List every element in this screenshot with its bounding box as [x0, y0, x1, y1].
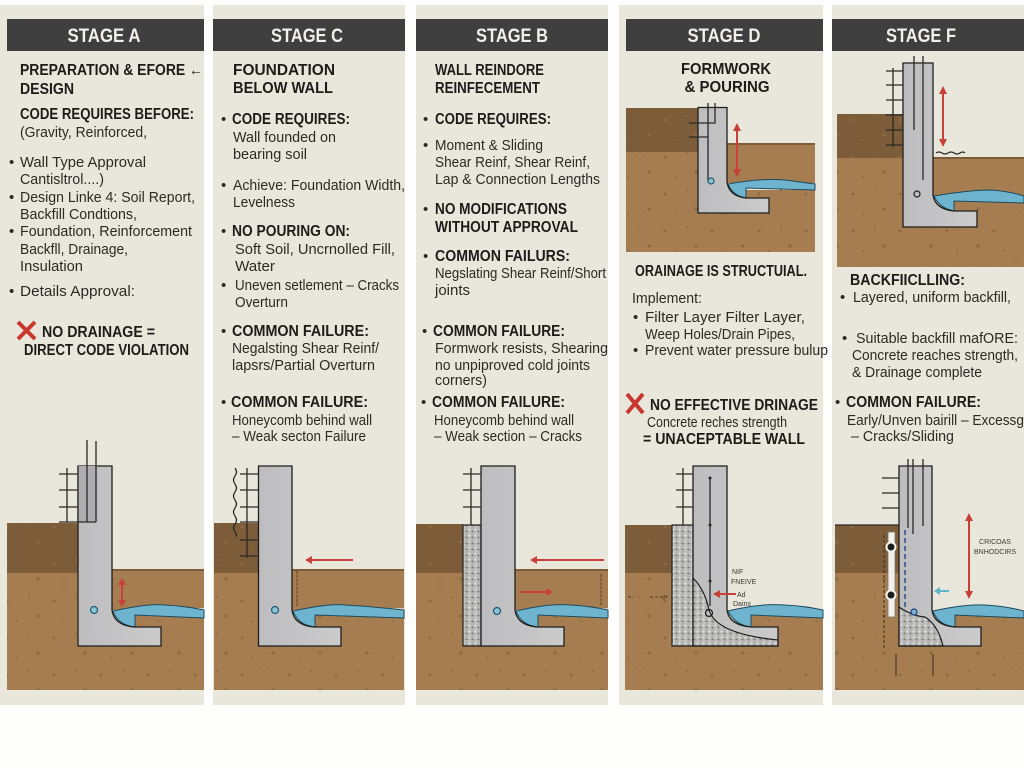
text: stage A requirements: Design Linke 4: Soil Report, — [20, 189, 195, 206]
text: stage C requirements: FOUNDATION — [233, 62, 335, 79]
text: stage D requirements: ORAINAGE IS STRUCTUIAL. — [635, 263, 807, 280]
panel: stage A — [0, 5, 204, 705]
text: stage F requirements: • — [835, 394, 840, 411]
text: stage B requirements: • — [423, 201, 428, 218]
diagram: stage D lower wall section: Dains — [733, 601, 751, 608]
text: stage B requirements: Honeycomb behind wall — [434, 412, 574, 429]
text: stage B requirements: COMMON FAILURE: — [432, 394, 565, 411]
text: stage D requirements: Filter Layer Filter Layer, — [645, 309, 805, 326]
text: stage A requirements: Details Approval: — [20, 283, 135, 300]
text: stage B requirements: CODE REQUIRES: — [435, 111, 551, 128]
text: stage D requirements: Implement: — [632, 290, 702, 307]
text: stage A requirements: CODE REQUIRES BEFORE: — [20, 106, 194, 123]
text: stage D requirements: • — [633, 309, 638, 326]
text: stage F requirements — [835, 272, 1024, 445]
text: stage F requirements: COMMON FAILURE: — [846, 394, 981, 411]
text: stage A requirements: • — [9, 189, 14, 206]
panel: stage F — [832, 5, 1024, 705]
text: stage B requirements: COMMON FAILURS: — [435, 248, 570, 265]
text: stage B requirements: • — [423, 248, 428, 265]
text: stage A requirements: Foundation, Reinforcement — [20, 223, 193, 240]
panel: stage C — [213, 5, 405, 705]
text: stage C requirements: Wall founded on — [233, 129, 336, 146]
text: stage F requirements: Suitable backfill mafORE: — [856, 330, 1018, 347]
text: stage C requirements: Achieve: Foundation Width, — [233, 177, 405, 194]
text: stage A requirements: • — [9, 223, 14, 240]
text: stage C requirements: Soft Soil, Uncrnolled Fill, — [235, 241, 395, 258]
text: stage A requirements: Backfll, Drainage, — [20, 241, 128, 258]
text: stage C requirements: BELOW WALL — [233, 80, 333, 97]
text: stage B requirements — [421, 62, 608, 445]
text: stage B requirements: WITHOUT APPROVAL — [435, 219, 578, 236]
text: stage B requirements: joints — [434, 282, 470, 299]
subheading: formwork and pouring — [681, 61, 771, 96]
text: stage B requirements: no unpiproved cold joints — [435, 357, 590, 374]
text: stage C requirements: bearing soil — [233, 146, 307, 163]
heading: stage C: STAGE C — [271, 26, 343, 47]
text: stage C requirements: • — [221, 394, 226, 411]
callout: no drainage: NO DRAINAGE = — [42, 324, 155, 341]
text: stage B requirements: Moment & Sliding — [435, 137, 543, 154]
heading: stage F: STAGE F — [886, 26, 956, 47]
text: stage A requirements: Backfill Condtions, — [20, 206, 137, 223]
callout: no effective drainage: Concrete reches strength — [647, 414, 787, 431]
callout: no drainage: DIRECT CODE VIOLATION — [24, 342, 189, 359]
text: stage C requirements: Overturn — [235, 294, 288, 311]
diagram: stage D upper wall section — [626, 103, 815, 252]
text: stage B requirements: Lap & Connection Lengths — [435, 171, 600, 188]
diagram: stage C wall section — [214, 466, 404, 690]
text: stage F requirements: • — [842, 330, 847, 347]
text: stage F requirements: BACKFIICLLING: — [850, 272, 965, 289]
subheading: formwork and pouring: & POURING — [684, 79, 770, 96]
icon: red cross — [18, 322, 35, 339]
text: stage C requirements: Negalsting Shear Reinf/ — [232, 340, 380, 357]
callout: no drainage — [24, 324, 189, 359]
text: stage A requirements: PREPARATION & EFORE ← — [20, 62, 203, 79]
text: stage B requirements: Formwork resists, Shearing — [435, 340, 608, 357]
icon: red cross — [627, 394, 643, 413]
text: stage C requirements: CODE REQUIRES: — [232, 111, 350, 128]
heading: stage D: STAGE D — [688, 26, 760, 47]
text: stage C requirements: Honeycomb behind wall — [232, 412, 372, 429]
text: stage B requirements: corners) — [435, 372, 487, 389]
text: stage B requirements: • — [422, 323, 427, 340]
text: stage F requirements: • — [840, 289, 845, 306]
text: stage C requirements — [221, 62, 405, 445]
text: stage A requirements: Wall Type Approval — [20, 154, 146, 171]
text: stage B requirements: REINFECEMENT — [435, 80, 540, 97]
text: stage F requirements: & Drainage complete — [852, 364, 982, 381]
heading: stage A — [7, 19, 204, 51]
text: stage C requirements: NO POURING ON: — [232, 223, 350, 240]
text: stage A requirements: DESIGN — [20, 81, 74, 98]
diagram: stage D lower wall section — [625, 466, 823, 690]
diagram: stage F lower wall section: BNHODCIRS — [974, 549, 1016, 556]
text: stage C requirements: Levelness — [233, 194, 295, 211]
text: stage F requirements: – Cracks/Sliding — [851, 428, 954, 445]
text: stage C requirements: Uneven setlement – Cracks — [235, 277, 399, 294]
diagram: stage F upper wall section — [837, 56, 1024, 267]
text: stage C requirements: • — [221, 323, 226, 340]
text: stage A requirements: Cantisltrol....) — [20, 171, 104, 188]
diagram: stage A wall section — [7, 440, 204, 690]
text: stage B requirements: • — [423, 111, 428, 128]
text: stage B requirements: COMMON FAILURE: — [433, 323, 565, 340]
panel: stage D — [619, 5, 828, 705]
text: stage A requirements: • — [9, 154, 14, 171]
panel: stage B — [416, 5, 608, 705]
diagram: stage F lower wall section — [835, 459, 1024, 690]
text: stage C requirements: – Weak secton Failure — [232, 428, 366, 445]
text: stage D requirements: Weep Holes/Drain Pipes, — [645, 326, 795, 343]
text: stage D requirements — [632, 263, 828, 359]
heading: stage F — [832, 19, 1024, 51]
text: stage B requirements: Shear Reinf, Shear Reinf, — [435, 154, 590, 171]
callout: no effective drainage — [643, 397, 818, 448]
text: stage B requirements: • — [423, 137, 428, 154]
text: stage C requirements: • — [221, 177, 226, 194]
heading: stage B: STAGE B — [476, 26, 548, 47]
text: stage C requirements: • — [221, 111, 226, 128]
text: stage B requirements: NO MODIFICATIONS — [435, 201, 567, 218]
diagram: stage F lower wall section: CRICOAS — [979, 539, 1011, 546]
text: stage F requirements: Layered, uniform backfill, — [853, 289, 1011, 306]
diagram: stage B wall section — [416, 466, 608, 690]
text: stage D requirements: Prevent water pressure bulup — [645, 342, 828, 359]
diagram: stage D lower wall section: Ad — [737, 592, 746, 599]
text: stage B requirements: – Weak section – Cracks — [434, 428, 582, 445]
text: stage C requirements: • — [221, 223, 226, 240]
heading: stage D — [626, 19, 823, 51]
heading: stage B — [416, 19, 608, 51]
heading: stage C — [213, 19, 405, 51]
text: stage D requirements: • — [633, 342, 638, 359]
callout: no effective drainage: = UNACEPTABLE WALL — [643, 431, 805, 448]
diagram: stage D lower wall section: FNEIVE — [731, 579, 757, 586]
text: stage C requirements: COMMON FAILURE: — [232, 323, 369, 340]
text: stage C requirements: COMMON FAILURE: — [231, 394, 368, 411]
text: stage B requirements: • — [421, 394, 426, 411]
text: stage A requirements: (Gravity, Reinforced, — [20, 124, 147, 141]
text: stage A requirements: Insulation — [20, 258, 83, 275]
text: stage A requirements: • — [9, 283, 14, 300]
diagram: stage D lower wall section: NIF — [732, 569, 743, 576]
subheading: formwork and pouring: FORMWORK — [681, 61, 771, 78]
text: stage C requirements: • — [221, 277, 226, 294]
text: stage B requirements: WALL REINDORE — [435, 62, 544, 79]
text: stage B requirements: Negslating Shear Reinf/Short — [435, 265, 607, 282]
text: stage C requirements: Water — [235, 258, 275, 275]
text: stage A requirements — [9, 62, 203, 300]
callout: no effective drainage: NO EFFECTIVE DRINAGE — [650, 397, 818, 414]
text: stage C requirements: lapsrs/Partial Overturn — [232, 357, 375, 374]
heading: stage A: STAGE A — [68, 26, 141, 47]
